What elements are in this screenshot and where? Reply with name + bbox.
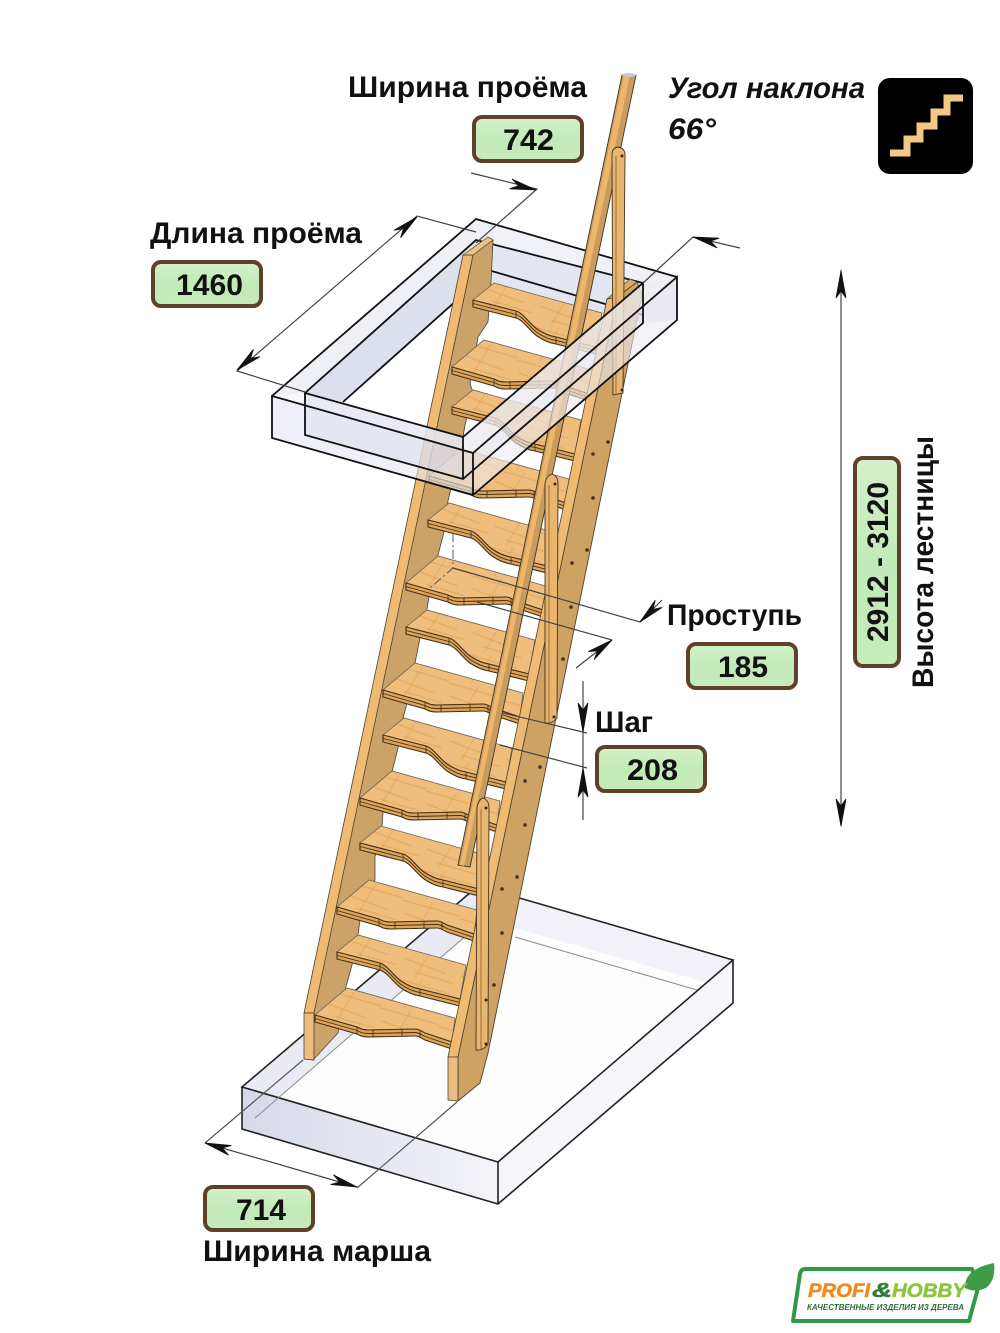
lower arrowhead <box>237 349 260 370</box>
front beam inner wall <box>305 393 463 479</box>
right dimension line <box>643 237 740 283</box>
logo: Profi & Hobby <box>793 1263 994 1321</box>
top cap <box>607 279 637 299</box>
tread 7 <box>383 663 523 724</box>
badge: 1460 <box>153 262 261 306</box>
right beam inner wall <box>463 283 643 479</box>
tread 12 <box>452 390 581 461</box>
left beam top face <box>272 219 476 396</box>
extension lines <box>205 1060 457 1188</box>
left inner wall <box>305 240 476 402</box>
logo frame <box>793 1269 978 1321</box>
tread 5 <box>360 771 500 832</box>
bottom floor platform <box>242 886 733 1204</box>
label: slope angle: 66° <box>668 113 717 146</box>
tread 13 <box>452 340 592 401</box>
tread 3 <box>337 880 477 941</box>
left dimension line <box>471 173 537 243</box>
inner face <box>313 237 493 1060</box>
tread 9 <box>406 556 546 617</box>
front beam outer face <box>272 396 473 495</box>
upper arrowhead <box>394 217 417 238</box>
rear inner wall <box>476 240 643 323</box>
top arrowhead <box>836 271 846 298</box>
platform top face <box>242 886 733 1162</box>
dimension: step 208 <box>500 681 588 820</box>
right stringer <box>448 279 642 1101</box>
handrail <box>458 73 636 867</box>
tread 6 <box>383 718 512 789</box>
label: stair height: Высота лестницы <box>907 436 940 688</box>
logo wordmark: HOBBY <box>892 1281 968 1302</box>
right arrowhead <box>693 237 719 248</box>
label: slope angle <box>668 72 865 146</box>
top cut <box>463 237 493 255</box>
logo tagline: КАЧЕСТВЕННЫЕ ИЗДЕЛИЯ ИЗ ДЕРЕВА <box>807 1303 964 1312</box>
dimension: height <box>836 270 846 826</box>
rear frame edges <box>272 219 677 402</box>
label: slope angle: Угол наклона <box>668 72 865 105</box>
logo wordmark <box>808 1280 968 1302</box>
badge: 208: 208 <box>627 754 678 787</box>
badge: 714 <box>205 1187 313 1230</box>
logo leaf <box>965 1263 994 1290</box>
dimension: opening width 742 <box>471 173 740 283</box>
arrowhead right <box>331 1175 357 1187</box>
screw holes <box>492 440 610 987</box>
logo wordmark: PROFI <box>808 1281 871 1302</box>
top arrowhead <box>578 703 588 732</box>
front frame edges <box>272 277 677 495</box>
bottom end <box>304 1013 314 1060</box>
badge: 742: 742 <box>503 124 554 157</box>
label: opening length: Длина проёма <box>150 217 362 250</box>
lower arrowhead <box>588 640 612 660</box>
platform edges <box>242 886 733 1204</box>
badge: height range: 2912 - 3120 <box>862 482 895 642</box>
post 2 middle <box>545 474 558 723</box>
logo wordmark: & <box>872 1280 892 1302</box>
upper opening frame: front translucent parts <box>272 277 677 495</box>
left stringer <box>304 237 493 1060</box>
badge: 185 <box>688 644 796 688</box>
upper arrowhead <box>640 600 662 622</box>
left arrowhead <box>510 179 536 190</box>
tread 2 <box>337 935 466 1006</box>
rail end cap <box>622 73 636 77</box>
badge: 185: 185 <box>718 651 768 684</box>
icon: stairs <box>878 78 973 174</box>
badge: 1460: 1460 <box>176 269 243 302</box>
edge strip <box>448 297 617 1057</box>
dimension: stair width 714 lines <box>205 1060 457 1188</box>
rail light facet <box>460 75 630 866</box>
label: step: Шаг <box>595 706 653 739</box>
post 1 lower <box>476 798 489 1050</box>
lines <box>500 681 587 820</box>
badge: height range <box>855 458 899 666</box>
outer face <box>458 282 642 1101</box>
platform inner lines <box>255 915 697 1118</box>
tread 4 <box>360 826 489 897</box>
dimension and extension lines <box>237 216 476 392</box>
dimension: tread depth 185 <box>430 533 662 668</box>
badge: 208 <box>597 747 705 791</box>
bottom end <box>448 1057 458 1101</box>
rear top face <box>476 219 677 283</box>
platform left face <box>242 1087 498 1204</box>
front beam top face <box>272 393 473 453</box>
front edge strip <box>304 255 473 1013</box>
vertical line <box>840 270 842 826</box>
dimension: opening length 1460 <box>237 216 476 392</box>
right beam top face <box>463 277 677 453</box>
rail main body <box>458 75 636 867</box>
label: opening width: Ширина проёма <box>348 71 587 104</box>
tread 11 <box>429 449 569 510</box>
platform recessed band left <box>242 886 490 1118</box>
upper opening frame: rear parts <box>272 219 677 402</box>
tread 10 <box>428 503 557 574</box>
right beam outer rear face <box>643 277 677 323</box>
tread 1 <box>315 988 455 1049</box>
post 3 top <box>612 147 625 395</box>
tread 14 <box>473 283 602 354</box>
extension lines <box>453 568 662 668</box>
arrowhead left <box>205 1143 231 1155</box>
label: tread depth: Проступь <box>667 599 802 632</box>
bottom arrowhead <box>578 768 588 797</box>
treads <box>315 283 602 1049</box>
dimension line <box>205 1143 357 1187</box>
badge: 714: 714 <box>236 1194 286 1227</box>
dashed guide <box>430 533 453 588</box>
label: flight width: Ширина марша <box>203 1235 431 1268</box>
badge: 742 <box>474 117 582 161</box>
platform recessed band back <box>478 886 733 985</box>
bottom arrowhead <box>836 799 846 826</box>
platform right face <box>498 960 733 1204</box>
right beam outer face <box>473 277 677 495</box>
tread 8 <box>406 610 535 681</box>
